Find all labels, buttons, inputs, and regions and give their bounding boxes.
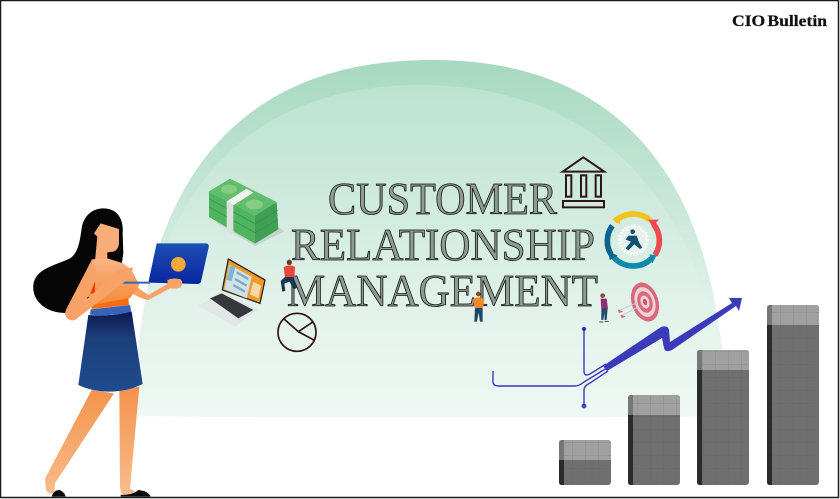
face and neck (94, 223, 119, 261)
icon: cycle of arrows with running figure (607, 214, 659, 266)
icon: bank building (563, 157, 604, 207)
far arm (130, 279, 182, 300)
bar chart (559, 305, 819, 485)
near arm (65, 260, 133, 320)
person: man in red sitting on title (281, 260, 297, 292)
bar 3 (697, 350, 749, 485)
icon: stack of money (209, 179, 284, 246)
title: Customer Relationship Management: RELATIONSHIP (291, 220, 595, 270)
circuit lines feeding growth arrow (493, 328, 608, 408)
brand: CIO Bulletin: CIO Bulletin (732, 13, 827, 30)
title: Customer Relationship Management (287, 174, 598, 316)
skirt (78, 312, 143, 392)
icon: laptop with dashboard (198, 259, 265, 327)
woman holding laptop (33, 208, 209, 497)
legs (45, 387, 139, 497)
icon: pie chart outline (278, 313, 316, 351)
icon: target with arrows (618, 279, 664, 325)
orange top (88, 258, 139, 307)
laptop (117, 243, 209, 284)
growth arrow (603, 298, 742, 371)
bar 1 (559, 440, 611, 485)
title: Customer Relationship Management: MANAGEMENT (287, 266, 598, 316)
person: man in orange (472, 292, 484, 322)
hair (33, 208, 123, 313)
belt (90, 305, 131, 315)
title: Customer Relationship Management: CUSTOMER (328, 174, 557, 224)
dome background (135, 60, 727, 418)
bar 2 (628, 395, 680, 485)
shoes (52, 490, 151, 497)
person: woman in purple (599, 293, 609, 322)
bar 4 (767, 305, 819, 485)
hand on laptop (167, 278, 182, 289)
